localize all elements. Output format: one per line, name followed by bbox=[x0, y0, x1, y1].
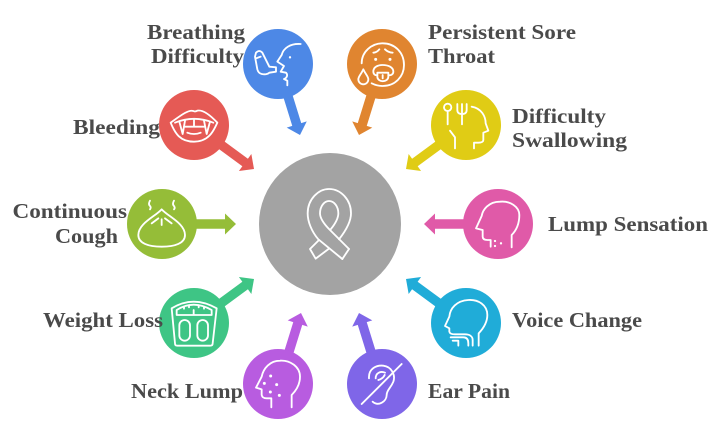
label: Persistent Sore bbox=[428, 20, 576, 44]
circle bbox=[159, 288, 229, 358]
arrow bbox=[268, 61, 310, 138]
label: Voice Change bbox=[512, 308, 642, 332]
arrow bbox=[400, 271, 472, 331]
arrow bbox=[188, 117, 260, 177]
label: Continuous bbox=[12, 199, 127, 223]
symptom: lump sensation bbox=[424, 189, 708, 259]
label: Weight Loss bbox=[43, 308, 163, 332]
label bbox=[147, 20, 245, 68]
arrow bbox=[349, 61, 391, 138]
symptom: ear pain bbox=[347, 310, 510, 419]
icon: head with throat dots bbox=[476, 202, 519, 247]
symptom: persistent sore throat bbox=[347, 20, 576, 138]
icon: weighing scale bbox=[172, 302, 217, 346]
icon: crossed-out ear bbox=[362, 364, 402, 404]
label bbox=[428, 20, 576, 68]
icon: spoon, fork and head bbox=[444, 104, 488, 148]
circle bbox=[159, 90, 229, 160]
icon: head with spots bbox=[256, 361, 300, 407]
symptom: neck lump bbox=[131, 310, 313, 419]
symptom: voice change bbox=[400, 271, 642, 358]
icon: awareness ribbon bbox=[308, 189, 351, 259]
symptom: continuous cough bbox=[12, 189, 236, 259]
label: Lump Sensation bbox=[548, 212, 708, 236]
label: Neck Lump bbox=[131, 379, 243, 403]
arrow bbox=[188, 271, 260, 331]
label: Difficulty bbox=[151, 44, 244, 68]
circle bbox=[347, 29, 417, 99]
circle bbox=[431, 90, 501, 160]
circle bbox=[127, 189, 197, 259]
label: Throat bbox=[428, 44, 496, 68]
icon: head with airway bbox=[445, 300, 487, 346]
label: Swallowing bbox=[512, 128, 627, 152]
circle bbox=[347, 349, 417, 419]
label bbox=[512, 104, 627, 152]
arrow bbox=[269, 310, 311, 387]
icon: face with tongue out bbox=[358, 43, 404, 86]
arrow bbox=[349, 310, 391, 387]
label: Ear Pain bbox=[428, 379, 510, 403]
symptom: difficulty swallowing bbox=[400, 90, 627, 177]
label bbox=[12, 199, 127, 248]
label: Cough bbox=[55, 224, 118, 248]
icon: inhaler and face bbox=[255, 44, 301, 85]
label: Bleeding bbox=[73, 115, 160, 139]
symptom: weight loss bbox=[43, 271, 260, 358]
arrow bbox=[400, 117, 472, 177]
label: Breathing bbox=[147, 20, 245, 44]
icon: lips with fangs bbox=[171, 111, 217, 142]
arrow bbox=[424, 214, 498, 234]
label: Difficulty bbox=[512, 104, 606, 128]
arrow bbox=[162, 214, 236, 234]
central circle with ribbon bbox=[259, 153, 401, 295]
circle bbox=[243, 29, 313, 99]
circle bbox=[463, 189, 533, 259]
icon: steamed bun bbox=[138, 201, 185, 247]
circle bbox=[431, 288, 501, 358]
circle bbox=[243, 349, 313, 419]
symptom: breathing difficulty bbox=[147, 20, 313, 138]
symptom: bleeding bbox=[73, 90, 260, 177]
